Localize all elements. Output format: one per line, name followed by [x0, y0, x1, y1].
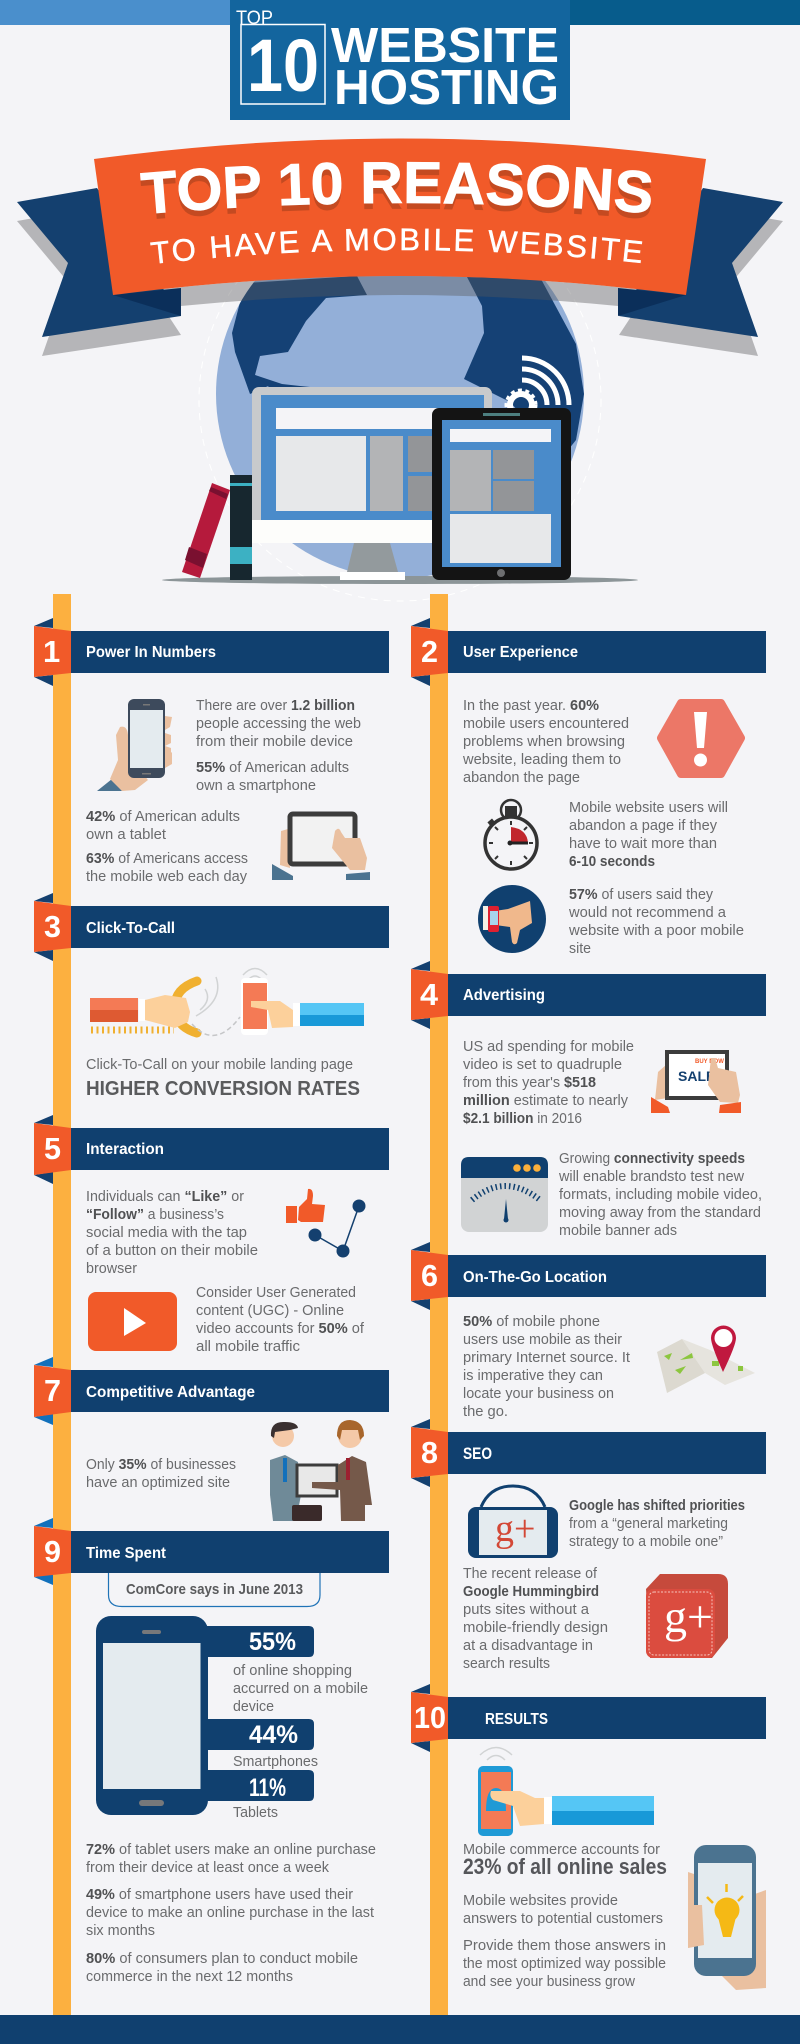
text: results: 23% of all online sales	[463, 1854, 667, 1879]
text: results: the most optimized way possible	[463, 1955, 666, 1972]
text: 35 percent: have an optimized site	[86, 1474, 230, 1491]
text: tablets: 42% of American adults	[86, 808, 240, 825]
text: user generated content: Consider User Generated	[196, 1284, 356, 1301]
text: google priorities: strategy to a mobile one”	[569, 1533, 723, 1550]
text: 60 percent: abandon the page	[463, 769, 580, 786]
text: connectivity speeds: formats, including mobile video,	[559, 1186, 762, 1203]
text: shopping statistics	[86, 1841, 376, 1985]
section 9 header	[34, 1518, 389, 1585]
text: shopping statistics: device to make an online purchase in the last	[86, 1904, 375, 1921]
chart: phone with percentage tabs: Tablets	[233, 1804, 278, 1821]
text: 57 percent: would not recommend a	[568, 904, 727, 921]
section 10 header	[411, 1684, 766, 1752]
section 6 header	[411, 1242, 766, 1310]
logo: Top 10 Website Hosting: TOP	[236, 8, 273, 29]
icon: hand holding phone	[97, 699, 172, 791]
text: 60 percent	[462, 697, 629, 786]
section 3 header	[34, 893, 389, 961]
text: results: Mobile websites provide	[463, 1892, 618, 1909]
text: ad spending: million estimate to nearly	[463, 1092, 628, 1109]
text: location: 50% of mobile phone	[463, 1313, 600, 1330]
monitor	[252, 387, 492, 572]
text: 6-10 seconds: abandon a page if they	[569, 817, 717, 834]
chart: phone with percentage tabs: 55%	[249, 1628, 296, 1656]
text: tablets	[86, 808, 248, 885]
text: results: Provide them those answers in	[463, 1937, 666, 1954]
text: like or follow: of a button on their mobile	[86, 1242, 258, 1259]
text: 35 percent	[86, 1456, 236, 1491]
text: 57 percent: website with a poor mobile	[568, 922, 744, 939]
banner shadow	[17, 207, 783, 356]
callout: ComCore: ComCore says in June 2013	[126, 1581, 303, 1598]
text: 60 percent: website, leading them to	[462, 751, 621, 768]
chart: phone with percentage tabs: of online shopping	[233, 1662, 352, 1679]
text: 57 percent: site	[569, 940, 591, 957]
title banner: TOP 10 REASONS	[140, 162, 652, 214]
text: user generated content	[196, 1284, 365, 1355]
callout: ComCore	[108, 1573, 320, 1606]
chart: phone with percentage tabs: 44%	[249, 1721, 298, 1749]
illustration: two businessmen shaking hands	[270, 1420, 372, 1521]
text: results: and see your business grow	[463, 1973, 635, 1990]
title banner: TOP 10 REASONS	[140, 169, 651, 219]
logo: Top 10 Website Hosting	[230, 0, 570, 120]
section 6 header: On-The-Go Location	[463, 1269, 607, 1286]
icon: g+ block: g+	[664, 1591, 713, 1642]
icon: stopwatch	[485, 800, 537, 869]
text: user generated content: video accounts for 50% of	[196, 1320, 365, 1337]
text: like or follow: social media with the tap	[86, 1224, 247, 1241]
chart: phone with percentage tabs	[96, 1616, 368, 1821]
text: shopping statistics: commerce in the next 12 months	[86, 1968, 293, 1985]
text: location: is imperative they can	[463, 1367, 603, 1384]
text: like or follow: “Follow” a business’s	[86, 1206, 224, 1223]
tablet	[432, 408, 571, 580]
icon: g+ block	[646, 1574, 728, 1658]
section 2 header: 2	[421, 634, 438, 669]
illustration: hand tapping phone	[478, 1748, 654, 1836]
icon: thumbs down with watch	[478, 885, 546, 953]
text: connectivity speeds: Growing connectivity speeds	[559, 1150, 745, 1167]
icon: tablet with sale: BUY NOW	[695, 1059, 724, 1065]
title banner: TO HAVE A MOBILE WEBSITE	[150, 228, 642, 264]
text: 60 percent: mobile users encountered	[463, 715, 629, 732]
section 9 header: Time Spent	[86, 1545, 166, 1562]
text: like or follow: browser	[86, 1260, 137, 1277]
text: 1.2 billion: 55% of American adults	[196, 759, 349, 776]
text: 6-10 seconds: 6-10 seconds	[569, 853, 655, 870]
text: 60 percent: problems when browsing	[463, 733, 625, 750]
text: connectivity speeds: mobile banner ads	[559, 1222, 677, 1239]
text: google priorities: from a “general marketing	[569, 1515, 728, 1532]
text: tablets: own a tablet	[86, 826, 167, 843]
text: 6-10 seconds	[569, 799, 728, 870]
text: hummingbird: mobile-friendly design	[463, 1619, 608, 1636]
icon: phone with g+ and handle	[468, 1486, 558, 1558]
text: 35 percent: Only 35% of businesses	[86, 1456, 236, 1473]
illustration: hand on handset calling hand on phone	[90, 968, 364, 1035]
text: ad spending	[463, 1038, 634, 1127]
text: hummingbird: Google Hummingbird	[463, 1583, 599, 1600]
text: higher conversion rates	[86, 1056, 360, 1100]
text: shopping statistics: six months	[86, 1922, 155, 1939]
timeline bars	[53, 594, 448, 2015]
text: 1.2 billion: from their mobile device	[196, 733, 353, 750]
text: 57 percent: 57% of users said they	[569, 886, 713, 903]
icon: phone with light bulb	[688, 1845, 766, 1990]
section 4 header	[411, 961, 766, 1029]
text: ad spending: from this year's $518	[463, 1074, 596, 1091]
icon: speed gauge window	[461, 1157, 548, 1232]
section 3 header: Click-To-Call	[86, 920, 175, 937]
text: results	[463, 1841, 667, 1990]
section 1 header: Power In Numbers	[86, 644, 216, 661]
section 10 header: 10	[414, 1700, 446, 1735]
text: ad spending: US ad spending for mobile	[463, 1038, 634, 1055]
section 1 header	[34, 618, 389, 686]
text: location: users use mobile as their	[463, 1331, 622, 1348]
chart: phone with percentage tabs: accurred on a mobile	[233, 1680, 368, 1697]
section 2 header	[411, 618, 766, 686]
text: 6-10 seconds: have to wait more than	[569, 835, 717, 852]
icon: tablet with sale: SALE	[678, 1068, 715, 1084]
text: shopping statistics: from their device at least once a week	[86, 1859, 329, 1876]
text: location	[463, 1313, 631, 1420]
section 4 header: Advertising	[463, 987, 545, 1004]
text: shopping statistics: 49% of smartphone users have used their	[86, 1886, 353, 1903]
chart: phone with percentage tabs: device	[233, 1698, 274, 1715]
icon: folded map with pin	[657, 1326, 755, 1393]
section 8 header: SEO	[463, 1444, 492, 1463]
footer bar	[0, 2015, 800, 2044]
text: location: the go.	[463, 1403, 508, 1420]
section 7 header: 7	[44, 1373, 61, 1408]
section 6 header: 6	[421, 1258, 438, 1293]
section 5 header	[34, 1115, 389, 1184]
section 7 header	[34, 1357, 389, 1425]
text: user generated content: content (UGC) - Online	[196, 1302, 344, 1319]
section 5 header: Interaction	[86, 1141, 164, 1158]
section 1 header: 1	[43, 634, 60, 669]
section 4 header: 4	[420, 977, 439, 1012]
chart: phone with percentage tabs: Smartphones	[233, 1753, 318, 1770]
text: google priorities: Google has shifted priorities	[569, 1497, 745, 1514]
icon: tablet with sale	[651, 1052, 741, 1113]
text: connectivity speeds	[558, 1150, 762, 1239]
logo: Top 10 Website Hosting: WEBSITE	[331, 19, 559, 73]
text: location: primary Internet source. It	[463, 1349, 631, 1366]
text: hummingbird	[463, 1565, 608, 1672]
text: 1.2 billion: There are over 1.2 billion	[196, 697, 355, 714]
text: hummingbird: search results	[463, 1655, 550, 1672]
text: location: locate your business on	[463, 1385, 614, 1402]
text: tablets: the mobile web each day	[86, 868, 247, 885]
globe	[198, 276, 602, 602]
text: 1.2 billion	[196, 697, 361, 794]
section 2 header: User Experience	[463, 644, 578, 661]
text: higher conversion rates: HIGHER CONVERSION RATES	[86, 1078, 360, 1100]
text: 1.2 billion: own a smartphone	[196, 777, 316, 794]
text: results: answers to potential customers	[463, 1910, 663, 1927]
text: higher conversion rates: Click-To-Call on your mobile landing page	[86, 1056, 353, 1073]
text: connectivity speeds: moving away from the standard	[559, 1204, 761, 1221]
top colour bar	[0, 0, 800, 25]
desk shadow and stand base	[162, 572, 638, 584]
banner ribbon tails	[17, 188, 783, 337]
section 8 header: 8	[421, 1435, 438, 1470]
text: results: Mobile commerce accounts for	[463, 1841, 660, 1858]
text: like or follow: Individuals can “Like” or	[86, 1188, 244, 1205]
text: tablets: 63% of Americans access	[86, 850, 248, 867]
logo: Top 10 Website Hosting: 10	[247, 24, 319, 107]
icon: phone with g+ and handle: g+	[495, 1508, 535, 1550]
text: shopping statistics: 80% of consumers plan to conduct mobile	[86, 1950, 358, 1967]
text: 1.2 billion: people accessing the web	[196, 715, 361, 732]
text: 6-10 seconds: Mobile website users will	[569, 799, 728, 816]
text: 57 percent	[568, 886, 744, 957]
text: connectivity speeds: will enable brandsto test new	[558, 1168, 744, 1185]
section 7 header: Competitive Advantage	[86, 1384, 255, 1401]
section 9 header: 9	[44, 1534, 61, 1569]
books	[182, 475, 252, 580]
title banner	[94, 138, 706, 295]
text: ad spending: $2.1 billion in 2016	[463, 1110, 582, 1127]
chart: phone with percentage tabs: 11%	[249, 1774, 286, 1802]
text: 60 percent: In the past year. 60%	[463, 697, 599, 714]
logo: Top 10 Website Hosting: HOSTING	[334, 61, 559, 115]
text: shopping statistics: 72% of tablet users make an online purchase	[86, 1841, 376, 1858]
section 10 header: RESULTS	[485, 1711, 548, 1728]
text: google priorities	[569, 1497, 745, 1550]
text: like or follow	[86, 1188, 258, 1277]
icon: warning hexagon	[661, 703, 741, 774]
icon: thumbs up and graph	[286, 1189, 366, 1258]
text: hummingbird: at a disadvantage in	[463, 1637, 593, 1654]
section 5 header: 5	[44, 1131, 61, 1166]
text: user generated content: all mobile traffic	[196, 1338, 300, 1355]
text: hummingbird: The recent release of	[463, 1565, 598, 1582]
text: hummingbird: puts sites without a	[463, 1601, 590, 1618]
section 8 header	[411, 1419, 766, 1487]
section 3 header: 3	[44, 909, 61, 944]
icon: hands on tablet	[272, 814, 370, 880]
icon: video play button	[88, 1292, 177, 1351]
text: ad spending: video is set to quadruple	[463, 1056, 622, 1073]
